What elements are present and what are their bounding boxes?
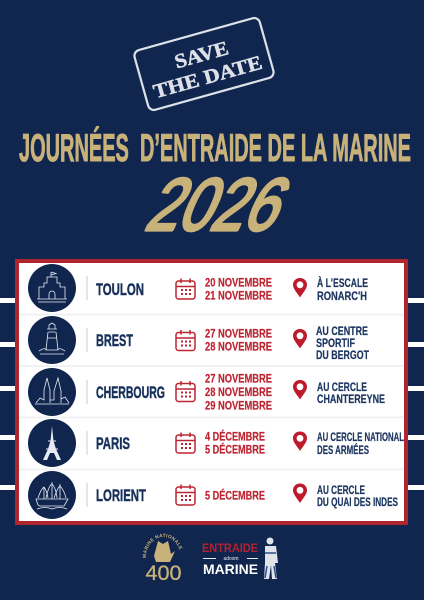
row: Cherbourg [28, 368, 385, 416]
row: Lorient: 5 DÉCEMBRE [205, 488, 265, 502]
stamp: save the date: THE DATE [151, 52, 265, 103]
row: Cherbourg: CHANTEREYNE [317, 394, 385, 406]
logo: Entraide Marine [202, 538, 278, 579]
row: Paris: 5 DÉCEMBRE [205, 442, 265, 456]
year 2026: 2026 [136, 164, 302, 246]
row: Brest: 27 NOVEMBRE [205, 326, 272, 340]
row: Brest [28, 316, 369, 364]
row: Cherbourg: 27 NOVEMBRE [205, 372, 272, 386]
row: Cherbourg: AU CERCLE [317, 382, 367, 394]
row: Toulon: 20 NOVEMBRE [205, 276, 272, 290]
row: Lorient: AU CERCLE [317, 485, 365, 497]
row: Lorient: LORIENT [96, 487, 146, 505]
row: Cherbourg: 28 NOVEMBRE [205, 385, 272, 399]
icon: Cherbourg skyline [28, 368, 76, 416]
row: Paris: 4 DÉCEMBRE [205, 428, 265, 444]
row: Toulon: 21 NOVEMBRE [205, 288, 272, 302]
side stripes [0, 298, 424, 490]
row: Brest: AU CENTRE [316, 326, 368, 338]
row: Cherbourg: 29 NOVEMBRE [205, 398, 272, 412]
logo: Entraide Marine: ENTRAIDE [202, 541, 258, 555]
row: Cherbourg: CHERBOURG [96, 384, 165, 402]
row: Lorient [28, 471, 398, 519]
row: Toulon: À L'ESCALE [317, 277, 368, 290]
icon: sailor [264, 538, 278, 579]
icon: sailing ship [28, 471, 76, 519]
logo: Marine nationale 400: 400 [146, 562, 182, 585]
logo: Marine nationale 400 [142, 534, 182, 585]
row: Toulon: RONARC'H [317, 291, 367, 303]
icon: Toulon fort [28, 264, 76, 312]
logo: Entraide Marine: adosm [223, 556, 239, 562]
row: Brest: BREST [96, 332, 133, 350]
logo: Entraide Marine: MARINE [203, 561, 258, 577]
row: Toulon: TOULON [96, 281, 144, 299]
icon: Eiffel tower [28, 419, 76, 467]
stamp: save the date: SAVE [172, 37, 231, 73]
panel: schedule [17, 261, 406, 523]
row: Paris [28, 419, 404, 467]
logo: Marine nationale 400: MARINE NATIONALE [142, 534, 182, 558]
row: Paris: PARIS [96, 435, 130, 453]
stamp: save the date [133, 17, 275, 111]
row: Toulon [28, 264, 368, 312]
row: Brest: DU BERGOT [316, 350, 369, 362]
icon: Brest lighthouse [28, 316, 76, 364]
row: Brest: SPORTIF [316, 338, 355, 350]
row: Brest: 28 NOVEMBRE [205, 340, 272, 354]
row: Paris: DES ARMÉES [317, 444, 369, 457]
